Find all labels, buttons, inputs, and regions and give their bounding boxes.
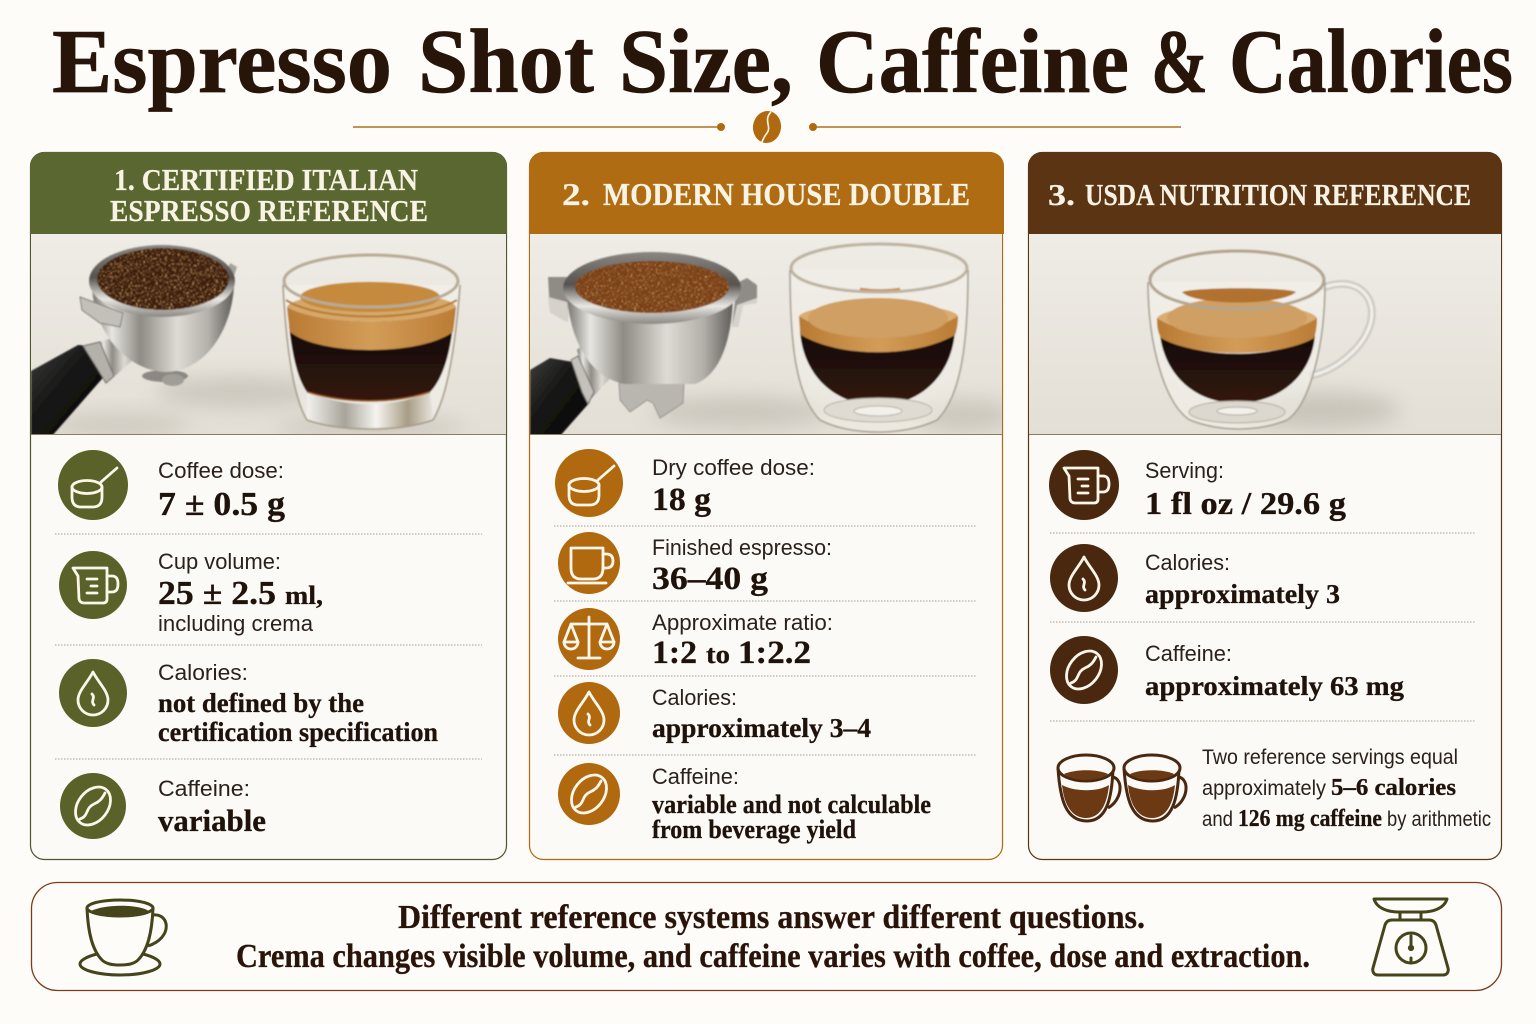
row: caffeine: Caffeine:	[652, 764, 739, 789]
icon: cup	[558, 532, 620, 594]
row: calories: certification specification	[158, 717, 438, 747]
row: calories	[558, 682, 871, 744]
two servings note	[1202, 746, 1491, 832]
row: approximate ratio: Approximate ratio:	[652, 610, 833, 635]
double-wall glass	[790, 244, 968, 432]
row: caffeine: variable	[158, 803, 266, 838]
title	[52, 11, 1513, 112]
icon: bean	[1050, 636, 1118, 704]
row: cup volume: 25 ± 2.5	[158, 575, 276, 612]
panel 3 header: 3.	[1048, 177, 1075, 212]
row: calories: not defined by the	[158, 688, 364, 718]
title: Caffeine	[816, 11, 1129, 112]
row: caffeine: approximately 63 mg	[1145, 671, 1405, 701]
row: cup volume	[59, 549, 323, 636]
row: caffeine	[60, 773, 266, 839]
row: calories: Calories:	[1145, 550, 1230, 575]
row: approximate ratio: 1:2	[652, 635, 697, 671]
row: cup volume: including crema	[158, 611, 314, 636]
title: Size,	[619, 11, 793, 112]
row: coffee dose: Coffee dose:	[158, 458, 284, 483]
icon: bean	[60, 773, 126, 839]
icon: cup on saucer	[80, 900, 166, 975]
icon: two espresso cups	[1058, 755, 1186, 821]
row: caffeine: Caffeine:	[158, 776, 250, 801]
icon: scoop	[555, 449, 623, 517]
two servings note: 126 mg caffeine	[1238, 806, 1382, 832]
row: caffeine: variable and not calculable	[652, 790, 931, 819]
icon: bean	[558, 763, 620, 825]
row: caffeine: Caffeine:	[1145, 641, 1232, 666]
banner message	[236, 899, 1310, 975]
two servings note: by arithmetic	[1387, 808, 1491, 831]
row: cup volume: ml,	[285, 581, 323, 610]
row: coffee dose: 7 ± 0.5 g	[158, 486, 285, 523]
espresso glass	[283, 255, 460, 429]
panel 2 header: 2.	[562, 176, 590, 212]
two servings note: and	[1202, 808, 1233, 831]
row: approximate ratio: 1:2.2	[738, 635, 811, 671]
row: calories: approximately 3–4	[652, 713, 871, 743]
row: cup volume: Cup volume:	[158, 549, 281, 574]
icon: balance scale	[558, 608, 620, 670]
row: finished espresso: Finished espresso:	[652, 535, 832, 560]
panel 1 header: ESPRESSO REFERENCE	[110, 193, 428, 228]
icon: kitchen scale	[1373, 899, 1448, 975]
panel: USDA nutrition reference	[1028, 152, 1502, 860]
two servings note: approximately	[1202, 777, 1326, 800]
row: approximate ratio	[558, 608, 833, 671]
row: serving: 1 fl oz / 29.6 g	[1145, 485, 1346, 521]
icon: measuring jug	[1049, 450, 1119, 520]
row: calories	[1050, 544, 1340, 612]
panel 2 header	[529, 152, 1004, 234]
icon: measuring jug	[59, 551, 127, 619]
row: caffeine	[1050, 636, 1405, 704]
row: dry coffee dose: Dry coffee dose:	[652, 455, 815, 480]
takeaway banner	[32, 882, 1502, 990]
panel 3 header	[1028, 152, 1502, 234]
row: finished espresso: 36–40 g	[652, 561, 769, 597]
title divider with coffee bean	[353, 109, 1181, 145]
two servings note: 5–6 calories	[1331, 775, 1456, 801]
two servings note: Two reference servings equal	[1202, 746, 1458, 769]
banner message: Different reference systems answer different questions.	[398, 899, 1145, 936]
icon: scoop	[58, 450, 128, 520]
panel 1 header: 1. CERTIFIED ITALIAN	[114, 162, 418, 197]
row: calories	[59, 659, 438, 747]
icon: drop	[558, 682, 620, 744]
row: coffee dose	[58, 450, 285, 523]
panel 1 header	[30, 152, 507, 234]
panel 1 photo: portafilter with ground coffee and espresso glass	[31, 234, 506, 438]
title: Espresso	[52, 11, 392, 112]
row: serving	[1049, 450, 1346, 521]
icon: drop	[1050, 544, 1118, 612]
panel 2 photo: portafilter and double-wall glass	[530, 234, 1015, 436]
row: calories: approximately 3	[1145, 579, 1340, 609]
icon: drop	[59, 659, 127, 727]
row: dry coffee dose	[555, 449, 815, 518]
title: Shot	[418, 11, 594, 112]
panel 2 header: MODERN HOUSE DOUBLE	[603, 176, 970, 212]
row: serving: Serving:	[1145, 458, 1224, 483]
row: approximate ratio: to	[706, 640, 730, 669]
row: calories: Calories:	[652, 685, 737, 710]
panel: certified Italian espresso reference	[30, 152, 507, 860]
row: caffeine	[558, 763, 931, 844]
title: &	[1151, 11, 1208, 112]
row: finished espresso	[558, 532, 832, 597]
banner message: Crema changes visible volume, and caffeine varies with coffee, dose and extraction.	[236, 938, 1310, 975]
panel 3 photo: double-wall espresso cup with handle	[1029, 234, 1501, 434]
panel: modern house double	[529, 152, 1015, 860]
row: dry coffee dose: 18 g	[652, 482, 712, 518]
row: caffeine: from beverage yield	[652, 815, 856, 844]
row: calories: Calories:	[158, 660, 248, 685]
